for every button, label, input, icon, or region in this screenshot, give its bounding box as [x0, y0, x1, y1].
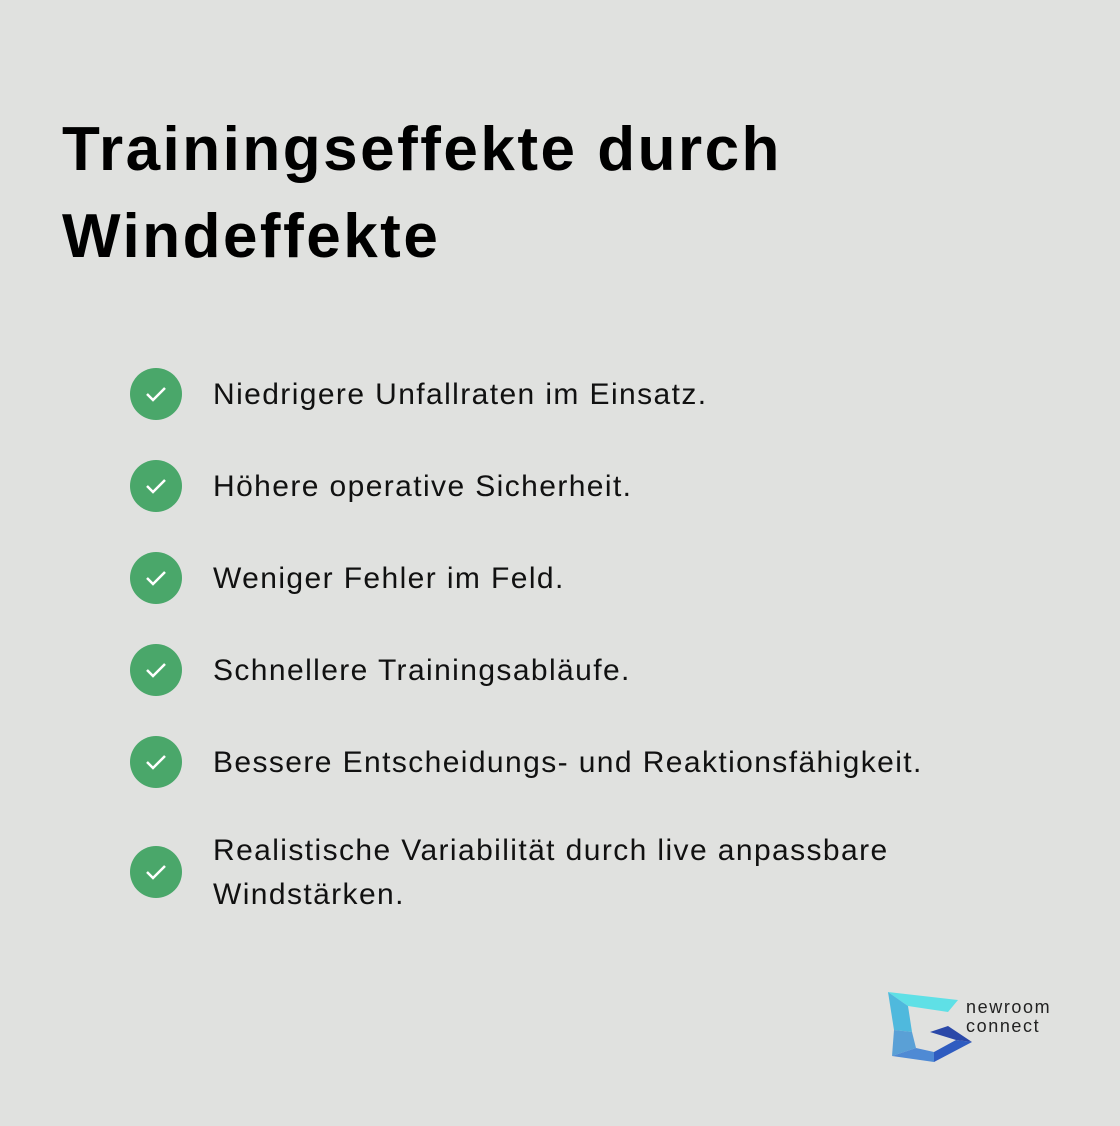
- item 2: [130, 460, 632, 512]
- item 4: Schnellere Trainingsabläufe.: [213, 654, 631, 687]
- item 2: Höhere operative Sicherheit.: [213, 470, 632, 503]
- item 6: Realistische Variabilität durch live anpassbare: [213, 834, 889, 867]
- item 1: [130, 368, 707, 420]
- item 3: [130, 552, 565, 604]
- logo: newroom: [966, 997, 1051, 1017]
- title: Windeffekte: [62, 202, 440, 271]
- logo: connect: [966, 1016, 1040, 1036]
- item 5: [130, 736, 923, 788]
- logo: [888, 992, 1051, 1062]
- title: [62, 115, 782, 271]
- item 3: Weniger Fehler im Feld.: [213, 562, 565, 595]
- item 6: Windstärken.: [213, 878, 405, 911]
- item 1: Niedrigere Unfallraten im Einsatz.: [213, 378, 707, 411]
- title: Trainingseffekte durch: [62, 115, 782, 184]
- item 6: [130, 834, 889, 911]
- item 5: Bessere Entscheidungs- und Reaktionsfähigkeit.: [213, 746, 923, 779]
- item 4: [130, 644, 631, 696]
